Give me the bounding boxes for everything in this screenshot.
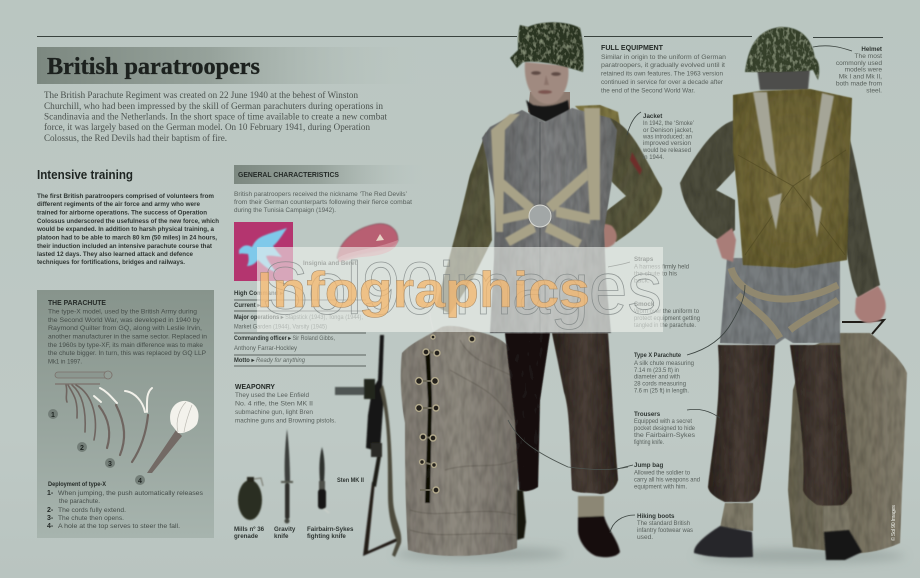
back bag <box>788 333 907 553</box>
back right arm <box>845 140 880 298</box>
panel text: Raymond Quilter from GQ, along with Leslie Irvin, <box>48 325 202 332</box>
intro text: force, it was largely based on the German model. On 10 February 1941, during Operation <box>44 122 370 133</box>
label: Mills grenade: grenade <box>234 533 259 540</box>
characteristics table: Major operations ▸ Slapstick (1943), Tonga (1944), <box>234 315 363 321</box>
step number 4 <box>135 475 145 485</box>
callout: helmet: commonly used <box>836 60 882 67</box>
callout: helmet: steel. <box>866 88 882 94</box>
neck and collar <box>528 92 570 118</box>
text <box>235 392 336 424</box>
characteristics table: Anthony Farrar-Hockley <box>234 346 297 352</box>
watermark: Infographics: Infographics <box>257 262 590 318</box>
text: intensive training: different regiments of the air force and army who were <box>37 201 200 208</box>
jump bag <box>401 326 518 556</box>
text: intensive training: would be expanded. In addition to harsh physical training, a <box>36 226 214 233</box>
back socks <box>720 503 850 532</box>
callout: type X parachute: A silk chute measuring <box>634 360 694 367</box>
floor shadows <box>395 547 905 563</box>
step number 3 <box>105 458 115 468</box>
text: machine guns and Browning pistols. <box>235 418 336 424</box>
watermark: Sol90images outline: Sol90images <box>262 247 662 330</box>
callout: type X parachute: 7.6 m (25 ft) in length. <box>634 388 689 394</box>
panel text: another manufacturer in the same sector. Replaced in <box>48 334 207 340</box>
panel heading: THE PARACHUTE <box>48 298 106 307</box>
text: intensive training: lasted 12 days. They also learned attack and defence <box>37 251 193 258</box>
callout: smock: tangled in the parachute. <box>634 322 696 329</box>
callout: trousers: Equipped with a secret <box>634 418 692 425</box>
label: gravity knife: knife <box>274 533 289 540</box>
callout: helmet: Helmet <box>861 46 882 53</box>
intro text: Colossus, the Red Devils had their baptism of fire. <box>44 133 227 144</box>
back left arm <box>680 120 735 241</box>
callout: straps: A harness firmly held <box>634 264 689 270</box>
panel text: Mk1 in 1997. <box>48 358 82 366</box>
text: intensive training: trained for airborne operations. The success of Operation <box>37 210 207 216</box>
text: intensive training: platoon had to be able to march 80 km (50 miles) in 24 hours, <box>37 234 217 242</box>
step number 3: 3 <box>108 461 112 468</box>
callout: trousers: the Fairbairn-Sykes <box>634 432 696 439</box>
characteristics table <box>234 291 366 366</box>
panel text <box>48 308 207 366</box>
panel: general characteristics <box>234 165 424 366</box>
callout: jacket: in 1944. <box>643 154 664 161</box>
intro text: Churchill, who had been impressed by the skill of German parachuters during operations in <box>44 101 383 112</box>
callout: helmet: models were <box>845 66 882 74</box>
callout: jump bag <box>634 462 700 490</box>
callout: jacket: improved version <box>643 140 691 147</box>
full equipment text: paratroopers, it gradually evolved until it <box>601 62 725 69</box>
callout: jacket <box>642 113 694 161</box>
deployment steps: The chute then opens. <box>58 515 124 522</box>
right arm <box>592 118 662 242</box>
callout: trousers: fighting knife. <box>634 439 664 446</box>
callout: helmet: both made from <box>836 80 882 88</box>
step number 2 <box>77 442 87 452</box>
full equipment text <box>601 43 726 94</box>
callout: trousers <box>634 411 696 446</box>
panel text: the Second World War, was developed in 1940 by <box>48 317 201 324</box>
characteristics table: High Command ▸ <box>234 291 284 297</box>
callout: hiking boots: Hiking boots <box>637 513 675 520</box>
panel text: the 1960s by type-XF, its main difference was to make <box>48 342 203 349</box>
deployment steps: 3- <box>47 515 54 522</box>
title band <box>37 47 422 84</box>
deployment steps <box>47 481 204 530</box>
step number 2: 2 <box>80 445 84 452</box>
bag eyelets <box>416 335 475 493</box>
deployment steps: 4- <box>47 523 54 530</box>
callout: straps: the chute to his <box>634 270 678 278</box>
title: British paratroopers <box>47 53 260 80</box>
heading: GENERAL CHARACTERISTICS <box>238 170 339 179</box>
back helmet <box>745 27 819 80</box>
characteristics table: Commanding officer ▸ Sir Roland Gibbs, <box>234 336 335 342</box>
full equipment text: Similar in origin to the uniform of German <box>601 54 726 61</box>
callout: jacket: would be released <box>642 147 691 154</box>
full equipment text: the end of the Second World War. <box>601 88 695 94</box>
text: intensive training: their induction included an intensive parachute course that <box>37 243 213 250</box>
callout: jump bag: carry all his weapons and <box>634 476 700 484</box>
deployment steps: 2- <box>47 507 54 514</box>
callout: type X parachute: 7.14 m (23.5 ft) in <box>634 367 679 374</box>
callout: helmet: The most <box>855 53 882 60</box>
callout: helmet <box>836 46 882 94</box>
deployment steps: A hole at the top serves to steer the fall. <box>58 523 180 530</box>
callout: trousers: pocket designed to hide <box>634 425 695 432</box>
characteristics table: Market Garden (1944), Varsity (1945) <box>234 324 327 330</box>
callout: smock: Smock <box>634 301 655 308</box>
panel text: the chute bigger. In turn, this was replaced by GQ LLP <box>48 350 207 357</box>
callout: jump bag: Allowed the soldier to <box>634 470 690 476</box>
text: intensive training: techniques for fortifications, bridges and railways. <box>37 259 185 266</box>
label: Fairbairn-Sykes <box>307 526 354 540</box>
text: submachine gun, light Bren <box>235 409 313 416</box>
smock torso <box>482 108 617 333</box>
full equipment text: FULL EQUIPMENT <box>601 43 663 52</box>
left arm <box>436 132 492 314</box>
callout: smock <box>634 301 700 329</box>
text: intensive training: The first British paratroopers comprised of volunteers from <box>37 193 214 200</box>
callout: type X parachute: Type X Parachute <box>634 352 682 359</box>
callout: jacket: was introduced; an <box>642 134 692 140</box>
label: gravity knife: Gravity <box>274 526 296 533</box>
characteristics table: Motto ▸ Ready for anything <box>234 358 306 364</box>
bag handle <box>842 320 884 334</box>
intro text: The British Parachute Regiment was created on 22 June 1940 at the behest of Winston <box>44 90 358 101</box>
callout: smock: protect equipment getting <box>634 315 700 322</box>
parachute deployment illustration <box>48 371 199 485</box>
legs <box>505 333 618 494</box>
pack straps <box>753 92 834 238</box>
label: Fairbairn-Sykes: Fairbairn-Sykes <box>307 526 354 533</box>
callout: hiking boots: used. <box>637 534 653 541</box>
callout: jump bag: Jump bag <box>634 462 663 469</box>
deployment steps: Deployment of type-X <box>48 481 107 488</box>
text: British paratroopers received the nickname ‘The Red Devils’ <box>234 191 408 198</box>
back boots <box>694 526 862 560</box>
callout: smock: Worn over the uniform to <box>634 308 699 315</box>
callout: jacket: In 1942, the ‘Smoke’ <box>643 120 694 127</box>
label: Mills grenade <box>234 526 265 540</box>
socks and boots <box>517 490 620 557</box>
callout: trousers: Trousers <box>634 411 661 418</box>
label: Sten: Sten MK II <box>337 477 364 484</box>
icon: beret <box>337 224 398 262</box>
full equipment text: continued in service for over a decade after <box>601 79 724 86</box>
panel: weaponry <box>234 335 401 557</box>
right hand <box>580 224 617 248</box>
intro text: Scandinavia and the Netherlands. In the short space of time available to create a new combat <box>44 112 387 122</box>
callout: hiking boots: infantry footwear was <box>637 527 694 534</box>
text: during the Tunisia Campaign (1942). <box>234 207 336 214</box>
label: Mills grenade: Mills nº 36 <box>234 526 265 533</box>
harness straps <box>491 108 600 248</box>
text: No. 4 rifle, the Sten MK II <box>235 400 313 408</box>
deployment steps: 1- <box>47 490 54 497</box>
parachute pack <box>733 89 852 268</box>
callout: hiking boots <box>637 513 694 541</box>
icon: Fairbairn-Sykes fighting knife <box>318 447 329 513</box>
callout: hiking boots: The standard British <box>637 520 690 527</box>
leader lines <box>508 46 852 533</box>
callout: type X parachute <box>634 352 694 394</box>
panel text: The type-X model, used by the British Army during <box>48 308 197 316</box>
deployment steps: the parachute. <box>59 498 100 505</box>
full equipment text: retained its own features. The 1963 version <box>601 70 723 78</box>
arm patch <box>630 152 642 175</box>
icon: Mills grenade <box>238 477 263 520</box>
callout: straps <box>634 256 689 284</box>
text: from their German counterparts following their fierce combat <box>234 199 412 206</box>
step number 4: 4 <box>138 478 142 485</box>
face <box>525 62 568 104</box>
watermark band <box>257 247 663 332</box>
deployment steps: When jumping, the push automatically releases <box>58 490 204 497</box>
callout: straps: Straps <box>634 256 654 263</box>
panel: the parachute <box>37 290 214 538</box>
waist and shorts <box>720 258 840 345</box>
copyright: © Sol 90 Images <box>890 505 897 541</box>
callout: jump bag: equipment with him. <box>634 484 687 490</box>
bag string <box>430 313 433 330</box>
text <box>234 191 412 214</box>
callout: type X parachute: 28 cords measuring <box>634 380 686 388</box>
intro text <box>44 90 387 144</box>
text: intensive training: Colossus underscored the usefulness of the new force, which <box>37 218 219 225</box>
back legs <box>708 345 852 507</box>
text: intensive training <box>36 193 219 266</box>
label: insignia and beret: Insignia and Beret <box>303 260 357 267</box>
deployment steps: The cords fully extend. <box>58 507 126 514</box>
belts <box>731 268 838 338</box>
text: They used the Lee Enfield <box>235 392 309 399</box>
step number 1 <box>48 409 58 419</box>
back right hand <box>855 286 886 323</box>
callout: jacket: Jacket <box>643 113 662 120</box>
callout: straps: back. <box>634 278 650 284</box>
icon: pegasus insignia <box>234 222 293 281</box>
pack shoulder <box>575 105 620 125</box>
callout: helmet: Mk I and Mk II, <box>839 74 882 80</box>
head <box>757 68 810 90</box>
front soldier figure <box>401 22 662 557</box>
harness disc <box>529 205 551 227</box>
heading: intensive training: Intensive training <box>37 167 133 182</box>
helmet <box>510 22 584 72</box>
icon: gravity knife <box>281 429 293 524</box>
callout: type X parachute: diameter and with <box>634 374 680 380</box>
callout: jacket: or Denison jacket, <box>643 127 693 134</box>
back soldier figure <box>680 27 907 560</box>
heading: WEAPONRY <box>235 382 275 391</box>
back left hand <box>716 228 736 262</box>
label: gravity knife <box>274 526 296 540</box>
characteristics table: Current ▸ <box>234 303 261 309</box>
label: Fairbairn-Sykes: fighting knife <box>307 533 346 540</box>
icon: Sten MK II <box>335 335 401 557</box>
step number 1: 1 <box>51 412 55 419</box>
